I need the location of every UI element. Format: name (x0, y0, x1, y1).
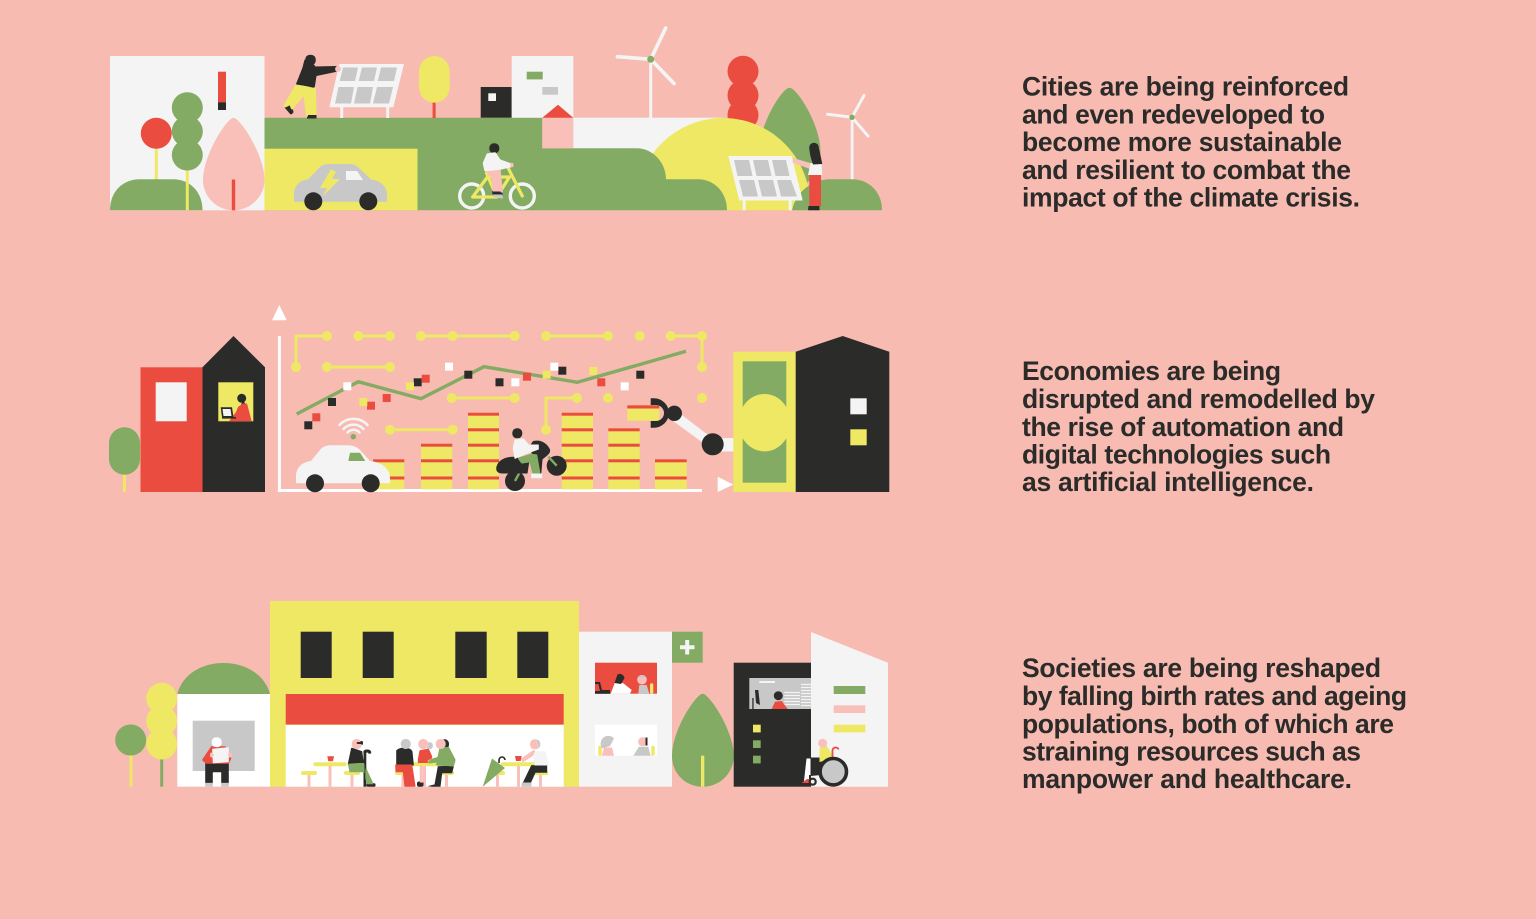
motorbike rider (497, 429, 567, 491)
text block: societies: Societies are being reshaped (1022, 653, 1381, 683)
black building (481, 87, 512, 118)
text block: societies: straining resources such as (1022, 736, 1361, 766)
cyclist (460, 144, 534, 208)
text block: economies: as artificial intelligence. (1022, 467, 1314, 497)
stacked bar chart (373, 413, 687, 489)
panel: cities illustration (110, 28, 882, 210)
domed house (177, 663, 270, 787)
closed umbrella (483, 757, 505, 787)
black office tower (796, 336, 889, 492)
text block: economies: digital technologies such (1022, 440, 1331, 470)
green leaf tree (759, 88, 820, 190)
text block: cities (1022, 72, 1360, 213)
text block: cities: Cities are being reinforced (1022, 72, 1349, 102)
chart axes (272, 305, 733, 492)
cafe tables and stools (301, 756, 548, 787)
text block: economies: disrupted and remodelled by (1022, 384, 1375, 414)
white band behind hills (573, 118, 723, 158)
person installing solar panel (284, 55, 340, 118)
text block: economies: the rise of automation and (1022, 412, 1344, 442)
circuit lines and nodes (291, 331, 707, 435)
text block: societies: by falling birth rates and ageing (1022, 681, 1407, 711)
white building with trees (110, 56, 264, 210)
white slanted building (811, 632, 888, 787)
red layered tree (728, 56, 758, 130)
elderly man with cane (348, 740, 375, 786)
yellow garage (264, 149, 418, 210)
green terraces (264, 118, 727, 210)
wind turbine large (618, 28, 674, 118)
man reading newspaper (203, 738, 232, 786)
banknote (733, 352, 796, 492)
person in wheelchair (802, 739, 846, 785)
consultation window white (595, 725, 657, 756)
text block: economies (1022, 356, 1375, 497)
green hill right (792, 179, 882, 210)
panel: economies illustration (109, 305, 889, 492)
black care building (734, 663, 811, 787)
wind turbine small (828, 96, 868, 180)
green tree (109, 427, 140, 492)
text block: cities: become more sustainable (1022, 127, 1342, 157)
text block: cities: impact of the climate crisis. (1022, 183, 1360, 213)
seated group at cafe (396, 740, 455, 786)
consultation window red (595, 663, 657, 694)
yellow layered tree (146, 683, 177, 787)
yellow cafe building (270, 601, 579, 787)
seated woman in white (522, 740, 548, 786)
green leaf tree (672, 694, 734, 787)
black house with worker window (202, 336, 265, 492)
yellow tree (419, 56, 450, 118)
wifi symbol (340, 419, 368, 439)
scattered data squares (304, 363, 644, 429)
small pink house (542, 105, 573, 148)
red house (140, 367, 202, 492)
text block: economies: Economies are being (1022, 356, 1281, 386)
panel: societies illustration (115, 601, 888, 787)
ground solar panel (728, 156, 803, 210)
autonomous car (296, 445, 390, 492)
white building (512, 56, 573, 118)
electric car (294, 164, 387, 210)
solar panel on roof (329, 64, 404, 118)
woman with solar panel (792, 143, 822, 210)
green round tree (115, 724, 146, 787)
green trend line (297, 351, 686, 414)
text block: cities: and even redeveloped to (1022, 99, 1325, 129)
yellow hill (636, 118, 810, 210)
clinic building (579, 632, 703, 787)
text block: cities: and resilient to combat the (1022, 155, 1351, 185)
text block: societies (1022, 653, 1407, 794)
text block: societies: manpower and healthcare. (1022, 764, 1352, 794)
robotic arm (627, 398, 734, 455)
text block: societies: populations, both of which are (1022, 709, 1394, 739)
